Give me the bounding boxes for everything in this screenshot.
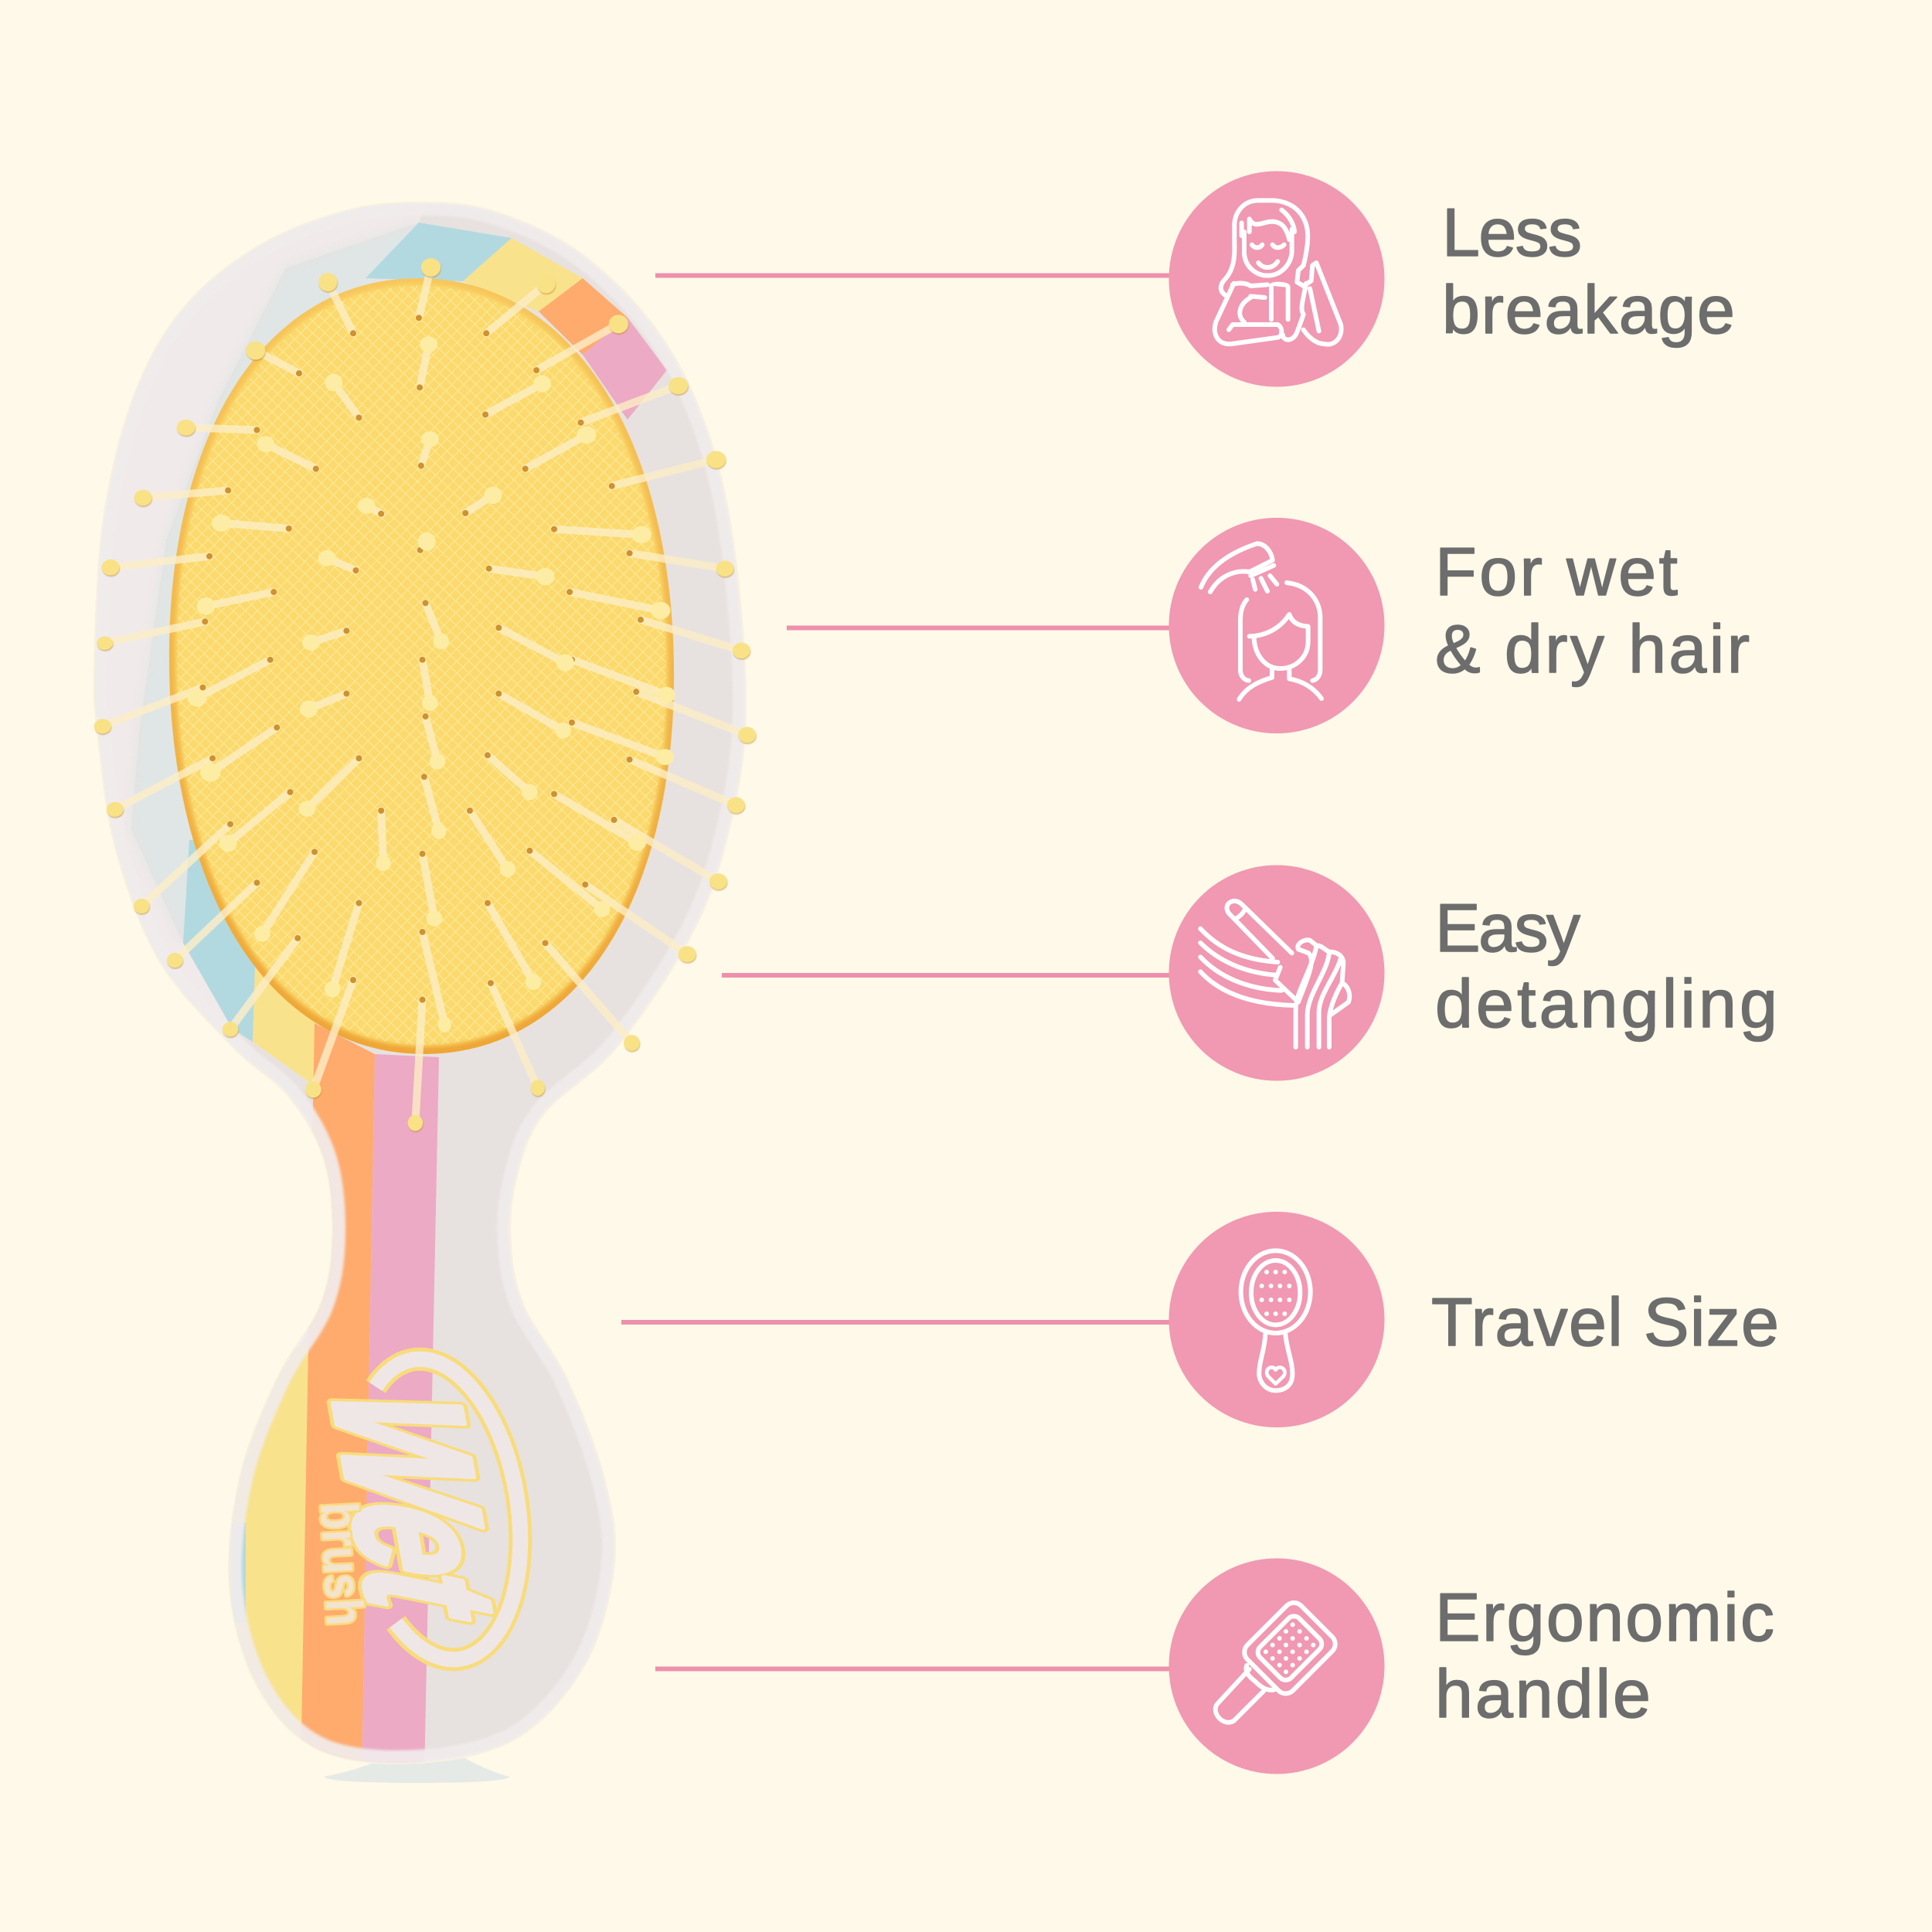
label: Less breakage: Less: [1442, 194, 1582, 270]
upper yellow stripe: [463, 238, 583, 311]
pin stems: [103, 267, 747, 1123]
upper blue stripe: [366, 223, 512, 281]
label: For wet & dry hair: For wet: [1435, 533, 1678, 610]
upper orange stripe: [539, 278, 628, 355]
label: Easy detangling: [1435, 889, 1777, 1042]
icon: small round brush: [1168, 1212, 1385, 1427]
label: For wet & dry hair: [1435, 533, 1750, 687]
logo wordmark Wet: Wet: [291, 1385, 539, 1625]
pin holes: [199, 315, 644, 1003]
outer pin balls: [94, 258, 756, 1131]
left head pale rim area: [108, 216, 420, 1022]
label: Less breakage: breakage: [1442, 271, 1735, 348]
label: Easy detangling: Easy: [1435, 889, 1580, 966]
icon: woman brushing hair: [1168, 172, 1385, 386]
icon: comb through hair: [1168, 866, 1385, 1080]
feature: less breakage: [1168, 172, 1735, 386]
logo wordmark Wet: Wet: [291, 1385, 539, 1625]
handle orange stripe: [300, 1023, 375, 1777]
label: Ergonomic handle: Ergonomic: [1435, 1579, 1774, 1655]
handle pink stripe: [362, 1054, 439, 1777]
product: hair brush: [77, 185, 756, 1783]
brush body: [77, 185, 745, 1777]
feature: easy detangling: [1168, 866, 1777, 1080]
label: Ergonomic handle: handle: [1435, 1655, 1651, 1732]
icon: shower and hair: [1168, 518, 1385, 733]
translucent rim: [229, 203, 745, 1763]
pale blue band around pad: [131, 223, 419, 943]
label: Less breakage: [1442, 194, 1735, 348]
icon: paddle brush: [1168, 1558, 1385, 1774]
lower yellow stripe: [253, 968, 315, 1085]
label: Ergonomic handle: [1435, 1579, 1774, 1732]
upper pink stripe: [583, 318, 667, 420]
logo wordmark brush: brush: [309, 1501, 374, 1628]
bristle pins: [94, 258, 756, 1131]
label: For wet & dry hair: & dry hair: [1435, 611, 1750, 687]
handle yellow stripe: [229, 1348, 308, 1739]
feature: ergonomic handle: [1168, 1558, 1774, 1774]
lower blue stripe: [183, 838, 255, 1042]
yellow cushion pad: [162, 274, 681, 1059]
feature: travel size: [1168, 1212, 1779, 1427]
label: Easy detangling: detangling: [1435, 965, 1777, 1042]
brush base stand: [324, 1753, 509, 1783]
label: Travel Size: Travel Size: [1431, 1284, 1779, 1360]
callout lines: [621, 274, 1173, 1671]
handle blue sliver: [232, 1522, 246, 1623]
inner pin balls: [187, 336, 675, 1032]
feature: for wet and dry hair: [1168, 518, 1750, 733]
logo oval ring: [355, 1347, 541, 1668]
